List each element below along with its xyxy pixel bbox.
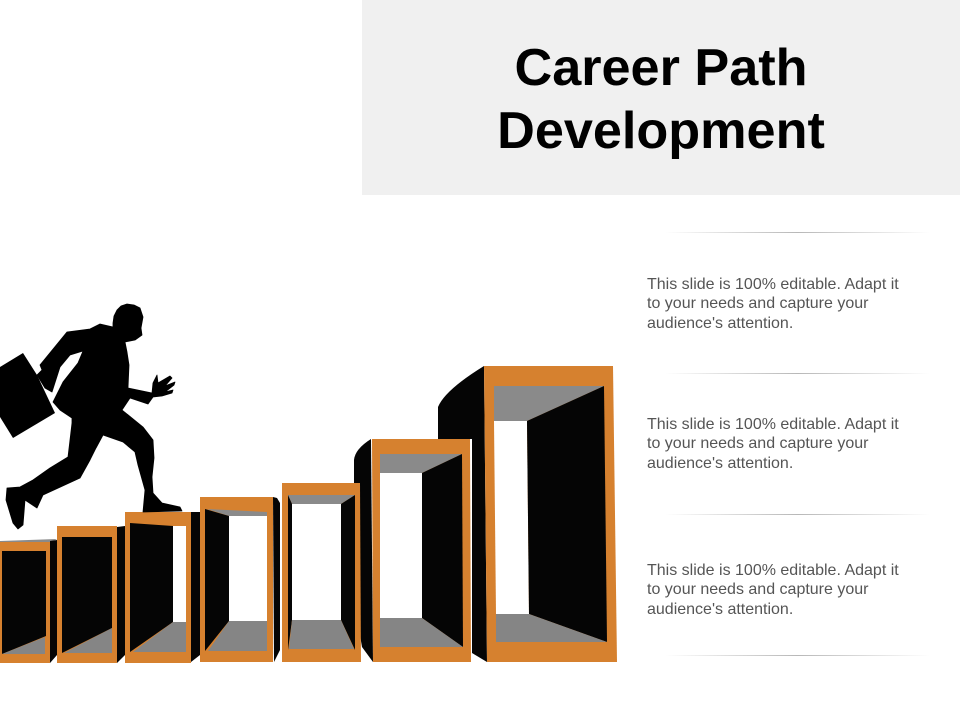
text block 3: audience's attention. — [647, 601, 793, 618]
box 6 — [354, 439, 471, 662]
text block 2 — [647, 416, 899, 472]
text block 3: to your needs and capture your — [647, 581, 868, 598]
text block 3: This slide is 100% editable. Adapt it — [647, 562, 899, 579]
text block 1: This slide is 100% editable. Adapt it — [647, 276, 899, 293]
text block 1 — [647, 276, 899, 332]
title — [497, 39, 825, 160]
text block 2: audience's attention. — [647, 455, 793, 472]
box 5 — [282, 483, 361, 662]
text block 2: This slide is 100% editable. Adapt it — [647, 416, 899, 433]
box 7 — [438, 366, 617, 662]
title: Career Path — [515, 39, 807, 97]
box 2 — [57, 526, 125, 663]
title: Development — [497, 102, 825, 160]
text block 3 — [647, 562, 899, 618]
box 1 — [0, 539, 57, 663]
title panel — [362, 0, 960, 195]
briefcase — [0, 353, 55, 438]
text block 2: to your needs and capture your — [647, 435, 868, 452]
box 3 — [125, 512, 200, 663]
icon: running businessman silhouette with briefcase — [0, 304, 182, 529]
text block 1: audience's attention. — [647, 315, 793, 332]
text block 1: to your needs and capture your — [647, 295, 868, 312]
box 4 — [200, 497, 280, 662]
